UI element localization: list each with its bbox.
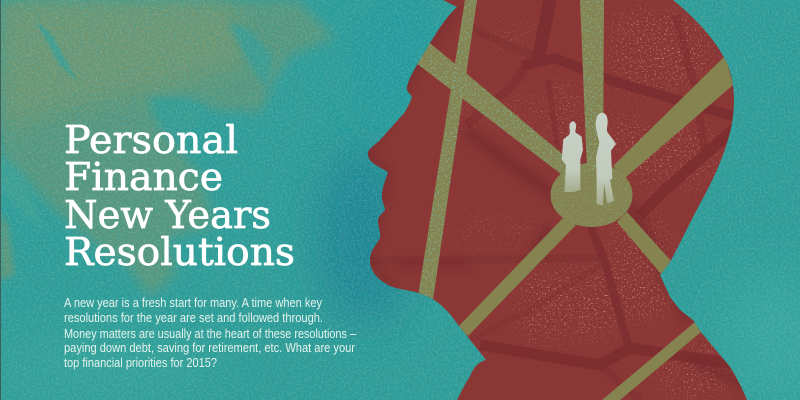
intro paragraph: resolutions for the year are set and followed through. — [64, 311, 323, 325]
head fill — [360, 0, 760, 400]
title: Finance — [64, 155, 223, 199]
title: Personal — [64, 118, 238, 162]
figure: man — [562, 121, 583, 192]
figure: woman — [596, 113, 616, 205]
figures: man and woman — [562, 113, 616, 205]
title — [64, 118, 295, 274]
intro paragraph: A new year is a fresh start for many. A time when key — [64, 296, 323, 310]
title: New Years — [64, 193, 271, 237]
road grain — [416, 0, 632, 300]
rim shadow along face edge — [368, 148, 388, 178]
teal streaks inside the wash — [35, 20, 78, 82]
head silhouette with road network — [360, 0, 760, 400]
intro paragraph — [64, 296, 356, 370]
intro paragraph: paying down debt, saving for retirement, etc. What are your — [64, 341, 355, 355]
central hub — [550, 163, 632, 227]
olive roads — [416, 0, 733, 400]
olive paint wash — [0, 0, 335, 298]
speckled texture patches — [442, 0, 738, 400]
title: Resolutions — [64, 230, 295, 274]
blurred cast shadows — [464, 128, 742, 388]
darker shadow network — [370, 0, 734, 371]
intro paragraph: Money matters are usually at the heart of these resolutions – — [64, 327, 356, 341]
intro paragraph: top financial priorities for 2015? — [64, 356, 217, 370]
